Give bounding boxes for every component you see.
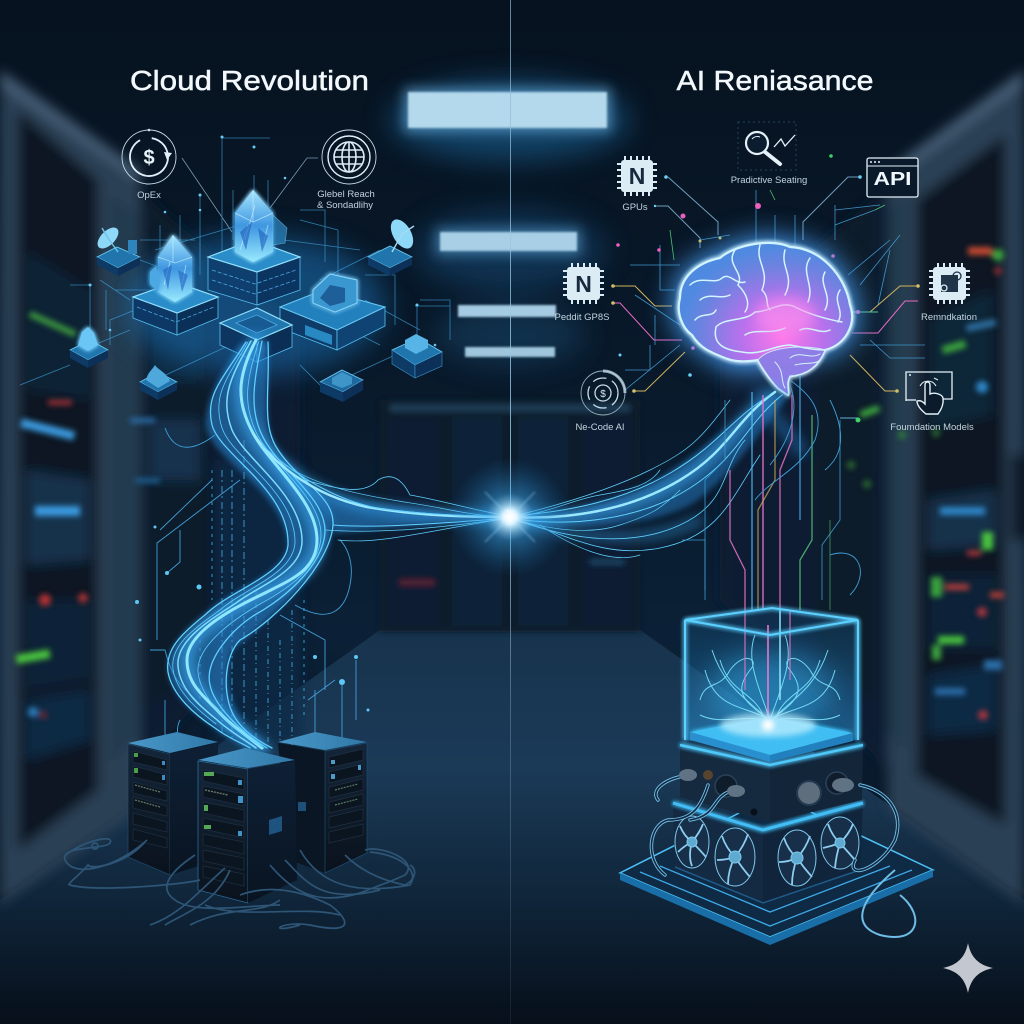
fans bbox=[675, 816, 859, 886]
icon: second GPU chip: N bbox=[575, 271, 592, 297]
icon: Foundation Models touch window bbox=[906, 372, 952, 414]
AI compute device bbox=[620, 608, 933, 945]
label: second GPU text: Peddit GP8S bbox=[555, 312, 609, 323]
glass cube bbox=[685, 608, 858, 750]
label: Global Reach and Scalability: Glebel Reach bbox=[317, 189, 375, 200]
connector cables bbox=[651, 775, 898, 875]
platform: left crystal tower bbox=[133, 235, 218, 335]
icon: globe bbox=[322, 130, 376, 184]
server rack: left bbox=[128, 732, 218, 875]
platform: central crystal tower bbox=[208, 190, 300, 305]
icon: second GPU chip bbox=[563, 263, 604, 304]
floor cables bbox=[65, 839, 415, 929]
title: Cloud Revolution: Cloud Revolution bbox=[130, 65, 369, 96]
label: No-Code AI: Ne-Code AI bbox=[575, 422, 625, 433]
icon: GPU chip bbox=[617, 156, 657, 196]
label: GPUs: GPUs bbox=[622, 202, 648, 213]
icon: API window: API bbox=[874, 169, 912, 189]
neural lines: AI labels to brain bbox=[613, 177, 925, 418]
glowing brain bbox=[679, 243, 852, 395]
platform: central chip block bbox=[220, 308, 292, 362]
icon: No-Code target: $ bbox=[600, 389, 606, 400]
title: AI Reniasance: AI Reniasance bbox=[676, 65, 874, 96]
server rack: center bbox=[198, 748, 297, 903]
icon: OpEx dollar cycle: $ bbox=[143, 147, 155, 169]
upper connector housing bbox=[680, 745, 863, 822]
data stream: cloud to spark bbox=[135, 340, 510, 750]
node: right satellite bbox=[368, 216, 418, 276]
spark at the convergence point bbox=[440, 380, 590, 640]
label: OpEx: OpEx bbox=[137, 190, 161, 201]
icon: Remediation chip bbox=[929, 263, 970, 304]
connector plugs bbox=[679, 769, 854, 797]
node: left satellite bbox=[94, 224, 140, 276]
label: Remediation text: Remndkation bbox=[921, 312, 977, 323]
icon: predictive magnifier with trend bbox=[738, 122, 796, 170]
label: Predictive Seating: Pradictive Seating bbox=[731, 175, 807, 186]
node: bottom right block bbox=[320, 370, 363, 402]
node: right cube bbox=[392, 334, 442, 378]
icon: No-Code target bbox=[581, 371, 625, 415]
watermark sparkle bbox=[943, 943, 993, 993]
data stream: spark to brain and chip bbox=[510, 375, 860, 610]
platform: right data block bbox=[280, 274, 385, 350]
center divider line bbox=[510, 0, 511, 1024]
ceiling lights bbox=[404, 88, 611, 357]
label: Global Reach and Scalability: & Sondadlihy bbox=[317, 200, 373, 211]
glowing top plate bbox=[690, 713, 853, 762]
node: bottom stack bbox=[140, 365, 177, 400]
base plate bbox=[620, 795, 933, 945]
lower fan housing bbox=[673, 803, 863, 903]
icon: OpEx dollar cycle bbox=[122, 129, 176, 184]
icon: GPU chip: N bbox=[629, 163, 645, 189]
neural nodes bbox=[611, 154, 920, 422]
icon: API window bbox=[867, 158, 918, 197]
server rack: right bbox=[278, 732, 367, 873]
label: Global Reach and Scalability bbox=[317, 189, 375, 211]
glow behind cloud network bbox=[125, 235, 385, 375]
node: bottom left crystal bbox=[70, 327, 108, 368]
label: Foundation Models: Foumdation Models bbox=[890, 422, 974, 433]
panel: cloud network circuit lines bbox=[20, 136, 450, 385]
